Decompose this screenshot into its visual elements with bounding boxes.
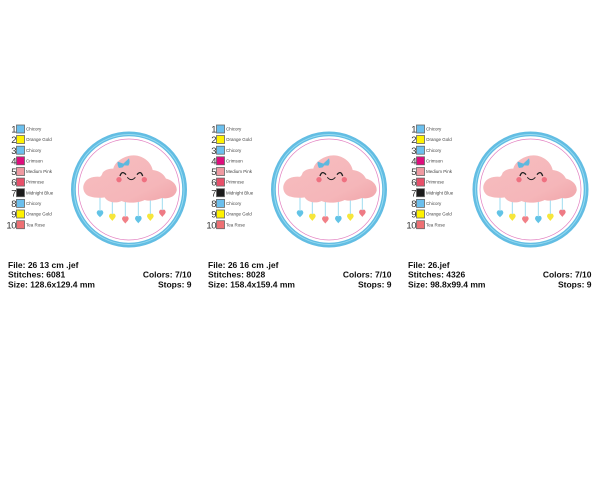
legend: thread colours 3: Chicory <box>426 201 442 206</box>
panel: design 2 <box>206 124 392 290</box>
legend: thread colours 1: 4 <box>11 156 16 167</box>
legend: thread colours 2: 4 <box>211 156 216 167</box>
legend: thread colours 2: Chicory <box>226 201 242 206</box>
legend: thread colours 1: Primrose <box>26 180 44 185</box>
legend: thread colours 1: Chicory <box>26 201 42 206</box>
file stats 3: Stops: 9 <box>558 280 592 290</box>
legend: thread colours 2: 6 <box>211 178 216 189</box>
legend: thread colours 3: Primrose <box>426 180 444 185</box>
legend: thread colours 2 <box>206 124 254 231</box>
legend: thread colours 1: Chicory <box>26 148 42 153</box>
legend: thread colours 3: Tea Rose <box>426 222 446 227</box>
legend: thread colours 3: Crimson <box>426 158 443 163</box>
file stats 1: Stitches: 6081 <box>8 270 65 280</box>
embroidery: ring with cloud 2 <box>273 134 385 245</box>
legend: thread colours 2: Chicory <box>226 126 242 132</box>
legend: thread colours 3: Chicory <box>426 126 442 132</box>
legend: thread colours 3: Medium Pink <box>426 169 453 174</box>
legend: thread colours 1: 8 <box>11 199 16 210</box>
legend: thread colours 1: 9 <box>11 210 16 221</box>
legend: thread colours 3: 6 <box>411 178 416 189</box>
legend: thread colours 2: Medium Pink <box>226 169 253 174</box>
panel: design 1 <box>6 124 192 290</box>
legend: thread colours 2: 8 <box>211 199 216 210</box>
file stats 2: Stops: 9 <box>358 280 392 290</box>
legend: thread colours 1: Orange Gold <box>26 137 52 142</box>
legend: thread colours 1: Medium Pink <box>26 169 53 174</box>
legend: thread colours 2: Midnight Blue <box>226 190 254 195</box>
legend: thread colours 2: 3 <box>211 146 216 157</box>
legend: thread colours 3: 5 <box>411 167 416 178</box>
legend: thread colours 2: Tea Rose <box>226 222 246 227</box>
legend: thread colours 2: 9 <box>211 210 216 221</box>
legend: thread colours 3: Midnight Blue <box>426 190 454 195</box>
legend: thread colours 1: Chicory <box>26 126 42 132</box>
legend: thread colours 1: 6 <box>11 178 16 189</box>
file stats 1 <box>8 260 192 290</box>
legend: thread colours 3 <box>406 124 454 231</box>
legend: thread colours 1: 7 <box>11 188 16 199</box>
file stats 2: Colors: 7/10 <box>343 270 392 280</box>
file stats 1: Colors: 7/10 <box>143 270 192 280</box>
legend: thread colours 3: Orange Gold <box>426 137 452 142</box>
legend: thread colours 2: Crimson <box>226 158 243 163</box>
legend: thread colours 3: 10 <box>406 220 416 231</box>
legend: thread colours 2: 7 <box>211 188 216 199</box>
legend: thread colours 1: Orange Gold <box>26 212 52 217</box>
legend: thread colours 1: Crimson <box>26 158 43 163</box>
embroidery: ring with cloud 1 <box>73 134 185 245</box>
embroidery: ring with cloud 3 <box>475 134 586 245</box>
legend: thread colours 3: 2 <box>411 135 416 146</box>
panel: design 3 <box>406 124 592 290</box>
file stats 2 <box>208 260 392 290</box>
legend: thread colours 1: Tea Rose <box>26 222 46 227</box>
legend: thread colours 2: 1 <box>211 124 216 136</box>
legend: thread colours 3: 1 <box>411 124 416 136</box>
legend: thread colours 1: 5 <box>11 167 16 178</box>
legend: thread colours 1: 3 <box>11 146 16 157</box>
legend: thread colours 2: Orange Gold <box>226 212 252 217</box>
legend: thread colours 2: Primrose <box>226 180 244 185</box>
legend: thread colours 2: 10 <box>206 220 216 231</box>
legend: thread colours 2: 5 <box>211 167 216 178</box>
legend: thread colours 1: 2 <box>11 135 16 146</box>
legend: thread colours 2: 2 <box>211 135 216 146</box>
file stats 2: Stitches: 8028 <box>208 270 265 280</box>
legend: thread colours 3: 8 <box>411 199 416 210</box>
file stats 1: Stops: 9 <box>158 280 192 290</box>
legend: thread colours 1 <box>6 124 54 231</box>
legend: thread colours 3: 3 <box>411 146 416 157</box>
legend: thread colours 3: Chicory <box>426 148 442 153</box>
file stats 2: Size: 158.4x159.4 mm <box>208 280 295 290</box>
file stats 3: Colors: 7/10 <box>543 270 592 280</box>
legend: thread colours 1: Midnight Blue <box>26 190 54 195</box>
file stats 3: File: 26.jef <box>408 260 450 270</box>
file stats 3: Stitches: 4326 <box>408 270 465 280</box>
legend: thread colours 2: Orange Gold <box>226 137 252 142</box>
file stats 1: File: 26 13 cm .jef <box>8 260 79 270</box>
legend: thread colours 2: Chicory <box>226 148 242 153</box>
file stats 3: Size: 98.8x99.4 mm <box>408 280 486 290</box>
legend: thread colours 1: 10 <box>6 220 16 231</box>
legend: thread colours 3: 4 <box>411 156 416 167</box>
legend: thread colours 3: 7 <box>411 188 416 199</box>
file stats 1: Size: 128.6x129.4 mm <box>8 280 95 290</box>
legend: thread colours 3: Orange Gold <box>426 212 452 217</box>
legend: thread colours 3: 9 <box>411 210 416 221</box>
file stats 3 <box>408 260 592 290</box>
legend: thread colours 1: 1 <box>11 124 16 136</box>
file stats 2: File: 26 16 cm .jef <box>208 260 279 270</box>
